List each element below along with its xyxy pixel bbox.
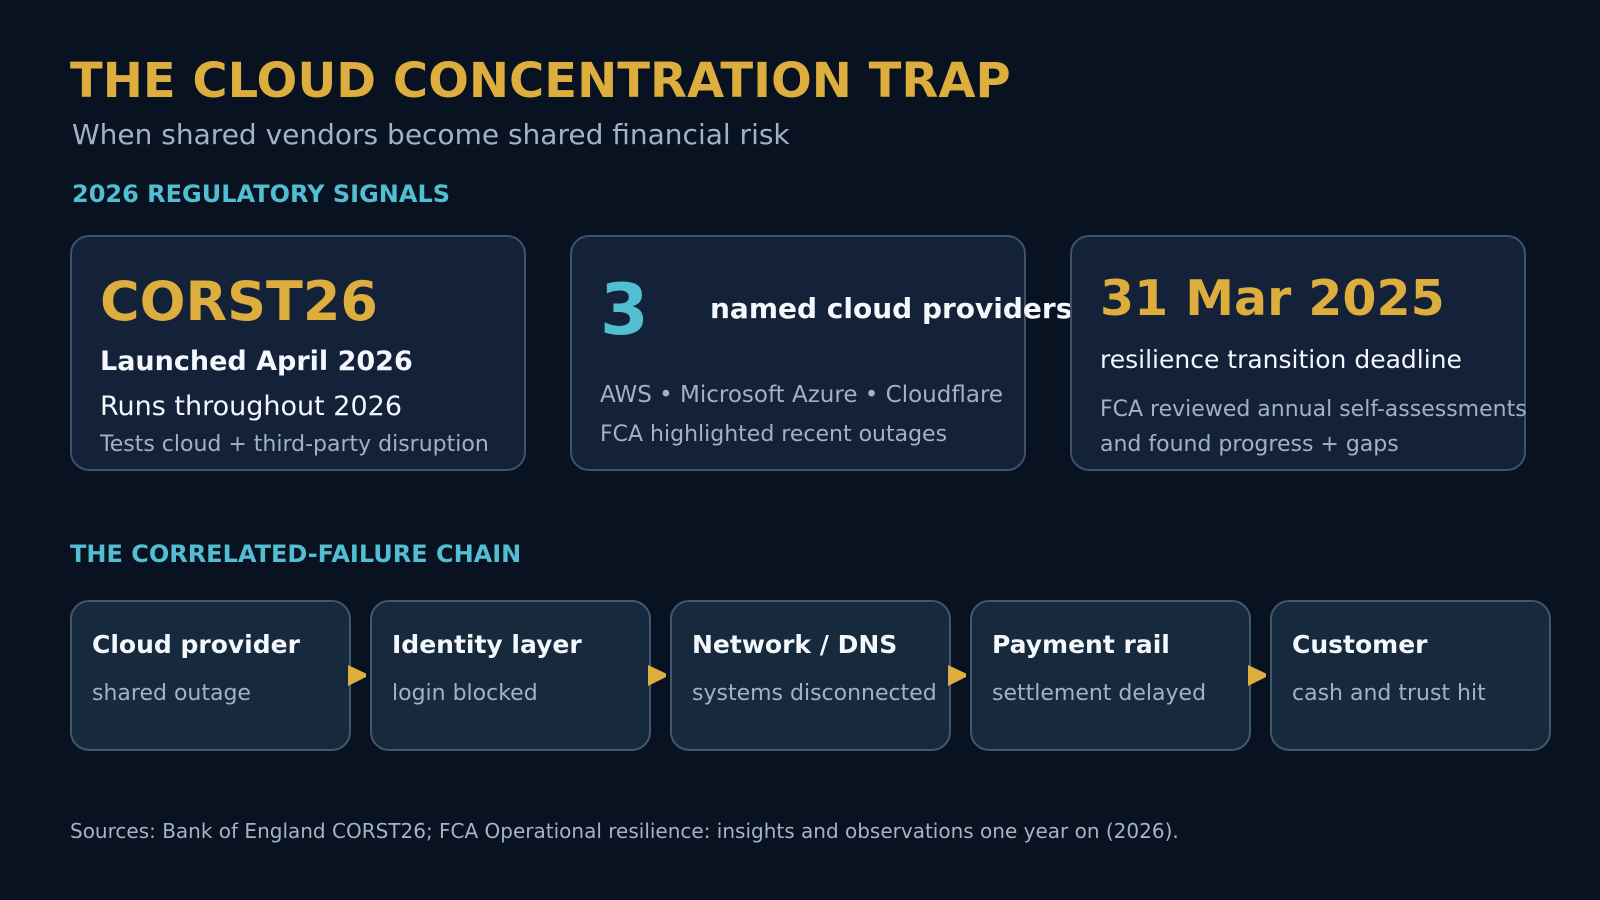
scope note: Tests cloud + third-party disruption (99, 432, 489, 457)
arrow 1 (348, 665, 366, 686)
stat label: named cloud providers (710, 292, 1072, 325)
chain step: network / DNS: systems disconnected (692, 681, 937, 706)
heading: correlated-failure chain: THE CORRELATED-FAILURE CHAIN (70, 540, 521, 568)
sources: Sources: Bank of England CORST26; FCA Operational resilience: insights and observations one year on (2026). (70, 819, 1179, 843)
duration: Runs throughout 2026 (100, 391, 402, 422)
chain step: payment rail (971, 601, 1250, 750)
chain step: identity layer (371, 601, 650, 750)
chain step: payment rail: settlement delayed (992, 681, 1206, 706)
arrow 4 (1248, 665, 1266, 686)
chain step: customer (1271, 601, 1550, 750)
arrow 3 (948, 665, 966, 686)
panel: CORST26 (71, 236, 525, 470)
review note line 1: FCA reviewed annual self-assessments (1100, 397, 1527, 422)
subtitle: When shared vendors become shared financial risk (72, 118, 790, 151)
chain step: cloud provider: Cloud provider (92, 630, 301, 659)
stat: CORST26: CORST26 (100, 270, 378, 333)
stat: date: 31 Mar 2025 (1100, 270, 1445, 327)
panel: resilience deadline (1071, 236, 1527, 470)
chain step: payment rail: Payment rail (992, 630, 1170, 659)
stat: 3: 3 (600, 269, 649, 351)
chain step: cloud provider (71, 601, 350, 750)
date label: resilience transition deadline (1100, 345, 1462, 374)
title: THE CLOUD CONCENTRATION TRAP (70, 53, 1011, 109)
chain step: cloud provider: shared outage (92, 681, 251, 706)
chain step: customer: Customer (1292, 630, 1428, 659)
chain step: customer: cash and trust hit (1292, 681, 1486, 706)
panel: named cloud providers (571, 236, 1072, 470)
provider note: FCA highlighted recent outages (600, 422, 947, 447)
chain step: network / DNS: Network / DNS (692, 630, 897, 659)
chain step: identity layer: Identity layer (392, 630, 582, 659)
launch date: Launched April 2026 (100, 346, 413, 377)
arrow 2 (648, 665, 666, 686)
heading: 2026 regulatory signals: 2026 REGULATORY SIGNALS (72, 180, 450, 208)
provider list: AWS • Microsoft Azure • Cloudflare (600, 382, 1003, 408)
review note line 2: and found progress + gaps (1100, 432, 1399, 457)
chain step: identity layer: login blocked (392, 681, 538, 706)
chain step: network / DNS (671, 601, 950, 750)
